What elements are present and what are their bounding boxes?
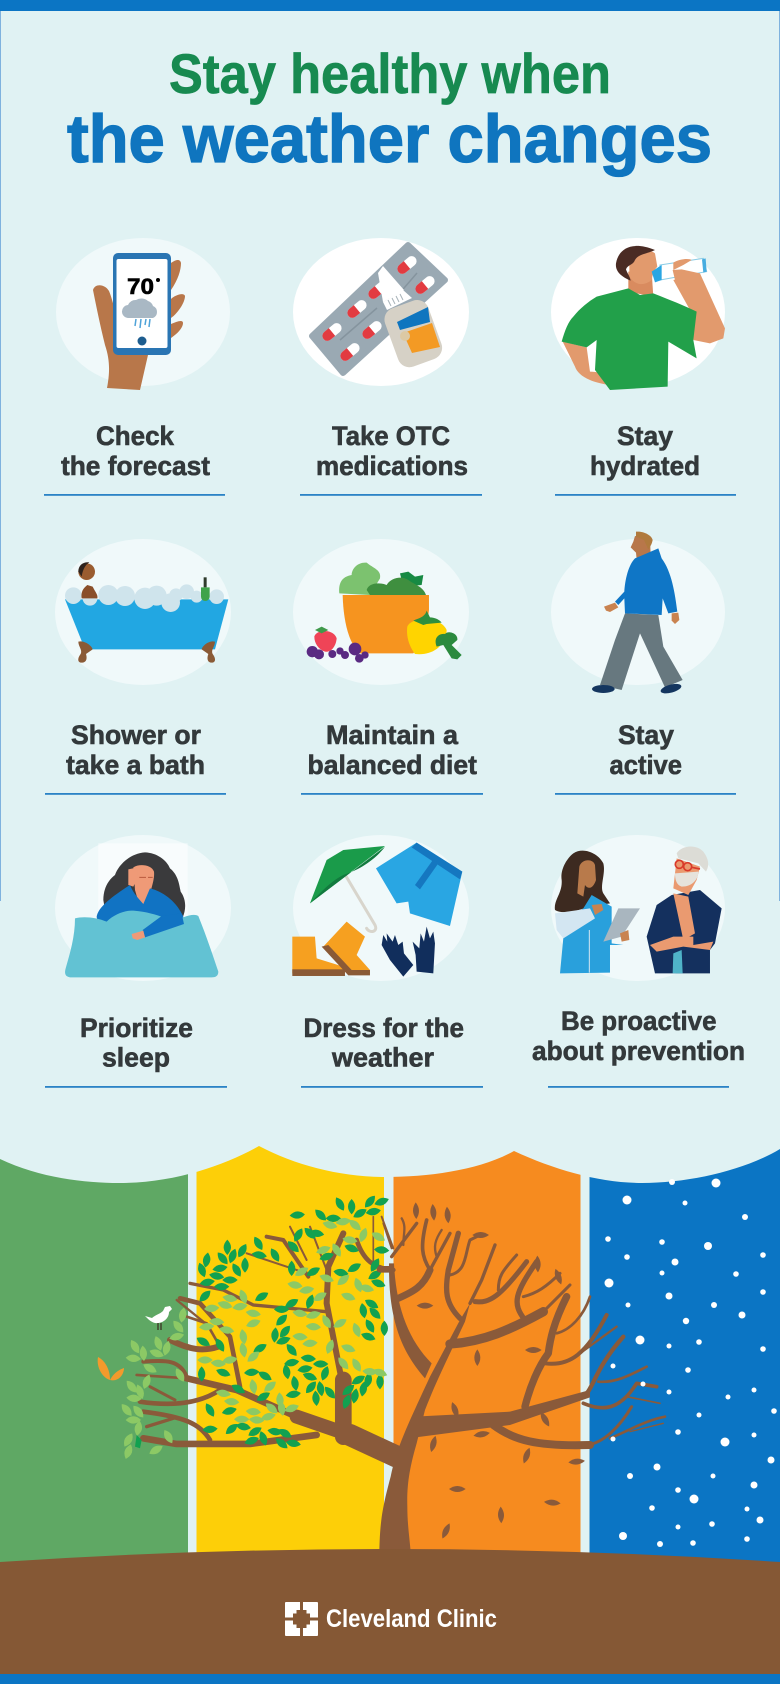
label — [590, 421, 700, 481]
label: take a bath — [66, 750, 205, 780]
label: Maintain a — [326, 720, 459, 750]
icon: hand holding phone — [56, 238, 230, 390]
icon: butterfly — [98, 1357, 124, 1380]
top bar — [0, 0, 780, 11]
logo: Cleveland Clinic: Cleveland Clinic — [326, 1605, 497, 1633]
label: about prevention — [532, 1036, 745, 1066]
icon: walking person — [551, 532, 725, 695]
bottom bar — [0, 1674, 780, 1684]
icon: clinician and patient — [551, 835, 725, 981]
label: active — [610, 750, 682, 780]
label: Check — [96, 421, 175, 451]
label: Dress for the — [304, 1013, 464, 1043]
label: weather — [331, 1042, 434, 1072]
label: Stay — [617, 421, 673, 451]
label: Be proactive — [561, 1006, 716, 1036]
label — [80, 1013, 193, 1072]
label: sleep — [102, 1042, 170, 1072]
panel: prioritize sleep — [45, 835, 231, 1088]
tree: right autumn and winter side — [379, 1202, 665, 1552]
panel: shower or take a bath — [45, 539, 231, 795]
panel: maintain a balanced diet — [293, 539, 483, 795]
label — [532, 1006, 745, 1066]
icon: person in bed — [55, 835, 231, 981]
title: the weather changes — [67, 101, 712, 177]
title — [67, 42, 712, 177]
icon: pills and bottle — [293, 238, 469, 386]
panel: stay hydrated — [551, 238, 736, 496]
label — [610, 720, 682, 780]
icon: bowl of vegetables and fruit — [293, 539, 469, 685]
title: Stay healthy when — [169, 42, 611, 105]
panel: stay active — [551, 532, 736, 795]
label: hydrated — [590, 451, 700, 481]
label — [61, 421, 210, 481]
logo: Cleveland Clinic — [285, 1602, 497, 1636]
label — [308, 720, 477, 780]
label — [304, 1013, 464, 1072]
label — [66, 720, 205, 780]
label: Shower or — [71, 720, 201, 750]
label: balanced diet — [308, 750, 477, 780]
panel: take OTC medications — [293, 238, 482, 496]
label — [316, 421, 468, 481]
icon: umbrella, shorts, boots, gloves — [292, 835, 469, 981]
label: the forecast — [61, 451, 210, 481]
label: Prioritize — [80, 1013, 193, 1043]
icon: white bird — [145, 1306, 172, 1330]
panel: be proactive about prevention — [532, 835, 745, 1088]
icon: hand holding phone: 70 — [127, 274, 154, 299]
panel: check the forecast — [44, 238, 230, 496]
tree: left summer side — [119, 1193, 397, 1460]
label: Stay — [618, 720, 674, 750]
icon: person drinking water — [551, 238, 725, 390]
panel: dress for the weather — [292, 835, 483, 1088]
icon: bathtub — [55, 539, 231, 685]
panel: ground — [0, 1549, 780, 1684]
label: Take OTC — [332, 421, 450, 451]
panel: seasons background — [0, 1100, 780, 1570]
label: medications — [316, 451, 468, 481]
snowfall — [604, 1178, 777, 1547]
